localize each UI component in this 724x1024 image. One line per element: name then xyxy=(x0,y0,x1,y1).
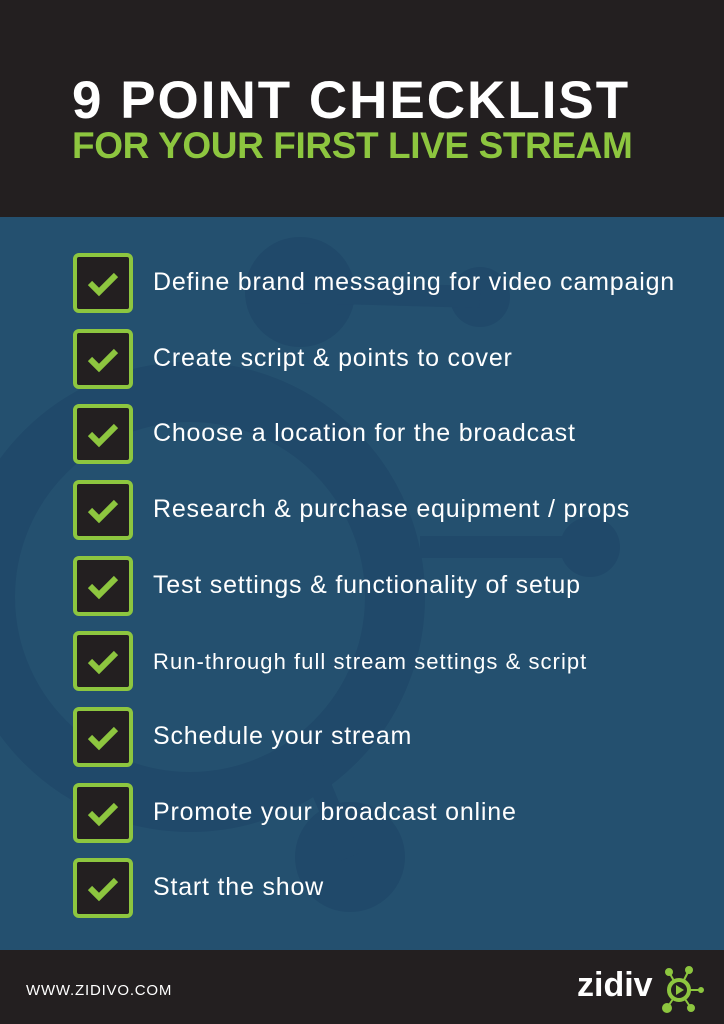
item 5 xyxy=(73,556,581,616)
item 6: Run-through full stream settings & script xyxy=(153,649,587,674)
title: 9 POINT CHECKLIST xyxy=(72,71,630,130)
item 1 xyxy=(73,253,675,313)
item 4 xyxy=(73,480,630,540)
checklist items xyxy=(73,253,675,918)
header panel xyxy=(0,0,724,217)
item 7 xyxy=(73,707,412,767)
footer xyxy=(0,950,724,1024)
logo xyxy=(577,966,704,1013)
item 9: Start the show xyxy=(153,873,324,901)
item 1: Define brand messaging for video campaign xyxy=(153,268,675,296)
item 3 xyxy=(73,404,576,464)
item 8 xyxy=(73,783,517,843)
item 2: Create script & points to cover xyxy=(153,344,513,372)
subtitle: FOR YOUR FIRST LIVE STREAM xyxy=(72,125,632,166)
logo: zidiv xyxy=(577,966,653,1004)
item 7: Schedule your stream xyxy=(153,722,412,750)
item 9 xyxy=(73,858,324,918)
item 5: Test settings & functionality of setup xyxy=(153,571,581,599)
panel: checklist xyxy=(0,217,724,950)
item 4: Research & purchase equipment / props xyxy=(153,495,630,523)
item 6 xyxy=(73,631,587,691)
item 3: Choose a location for the broadcast xyxy=(153,419,576,447)
item 8: Promote your broadcast online xyxy=(153,798,517,826)
website url: WWW.ZIDIVO.COM xyxy=(26,982,172,999)
background pattern xyxy=(0,217,724,950)
item 2 xyxy=(73,329,513,389)
